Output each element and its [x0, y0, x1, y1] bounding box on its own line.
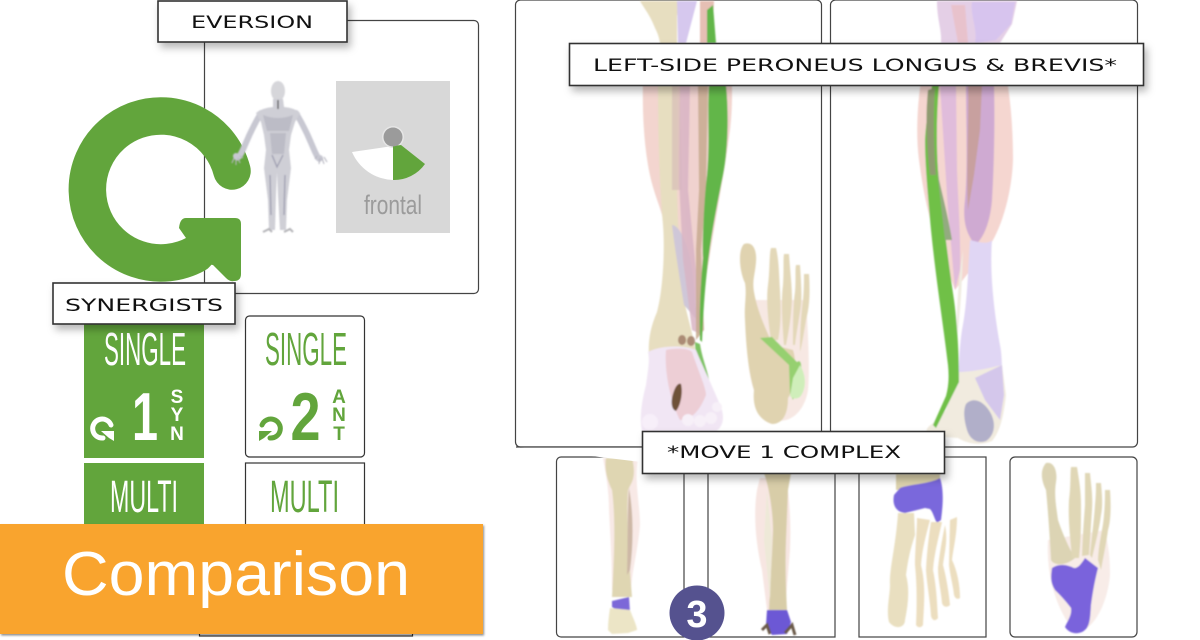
tile: single antagonist: 2: [290, 379, 320, 455]
panel: foot top view: [859, 457, 986, 637]
lilac shafts: [940, 85, 960, 290]
panel: eversion frame: [204, 20, 478, 294]
label: synergists: [53, 283, 235, 324]
panel: lower tibia view two: [516, 447, 835, 637]
green peroneus muscle: [700, 5, 728, 342]
banner: comparison: Comparison: [62, 540, 410, 609]
panel: back view of lower leg: [830, 0, 1138, 447]
label: eversion: EVERSION: [191, 13, 313, 33]
foot: [641, 346, 723, 431]
tile: multi synergist: MULTI: [110, 471, 178, 522]
tile: single antagonist: T: [333, 424, 345, 445]
tile: single antagonist: [246, 316, 364, 457]
tile: single synergist: [84, 322, 204, 458]
badge: number 3: [670, 586, 724, 640]
panel: lower tibia view one: [556, 457, 684, 637]
icon: large green rotation arrow: [87, 116, 241, 281]
tile: single synergist: N: [170, 424, 184, 445]
tile: single antagonist: N: [332, 405, 346, 426]
label: left-side peroneus longus and brevis: [570, 44, 1144, 86]
lilac top and interosseous: [677, 1, 697, 43]
tile: multi synergist: [84, 463, 204, 528]
label: left-side peroneus longus and brevis: LEFT-SIDE PERONEUS LONGUS & BREVIS*: [593, 56, 1117, 76]
tile: single antagonist: SINGLE: [265, 323, 347, 375]
lilac top bone: [937, 1, 1017, 43]
green muscle: [925, 85, 959, 428]
hidden lower panel edge: [200, 600, 412, 636]
tile: single synergist: S: [171, 387, 183, 408]
tibia bone: [640, 1, 695, 356]
label: eversion: [158, 1, 347, 42]
panel: frontal plane indicator: [336, 81, 450, 233]
leg artwork: [917, 1, 1017, 444]
panel: front view of lower leg: [516, 0, 822, 447]
foot bottom inset: [740, 243, 810, 424]
panel: foot bottom view: [1010, 457, 1137, 637]
lilac lower tibia: [959, 240, 1002, 395]
banner: comparison: [0, 524, 483, 634]
tile: single antagonist: A: [332, 387, 346, 408]
tile: single synergist: SINGLE: [104, 323, 186, 375]
heel: [926, 365, 1006, 444]
label: synergists: SYNERGISTS: [65, 296, 223, 316]
tile: multi antagonist: [246, 463, 364, 533]
leg artwork: [640, 1, 732, 431]
tile: multi antagonist: MULTI: [270, 471, 339, 522]
calf muscles: [643, 45, 732, 300]
label: move 1 complex: *MOVE 1 COMPLEX: [667, 443, 901, 463]
calf muscles: [917, 60, 1013, 290]
tile: single synergist: 1: [132, 379, 158, 455]
tile: single synergist: Y: [171, 405, 184, 426]
icon: human muscle figure: [232, 81, 327, 232]
fibula: [696, 85, 708, 340]
label: move 1 complex: [642, 432, 944, 474]
panel: frontal plane indicator: frontal: [364, 190, 422, 220]
badge: number 3: 3: [686, 594, 708, 636]
